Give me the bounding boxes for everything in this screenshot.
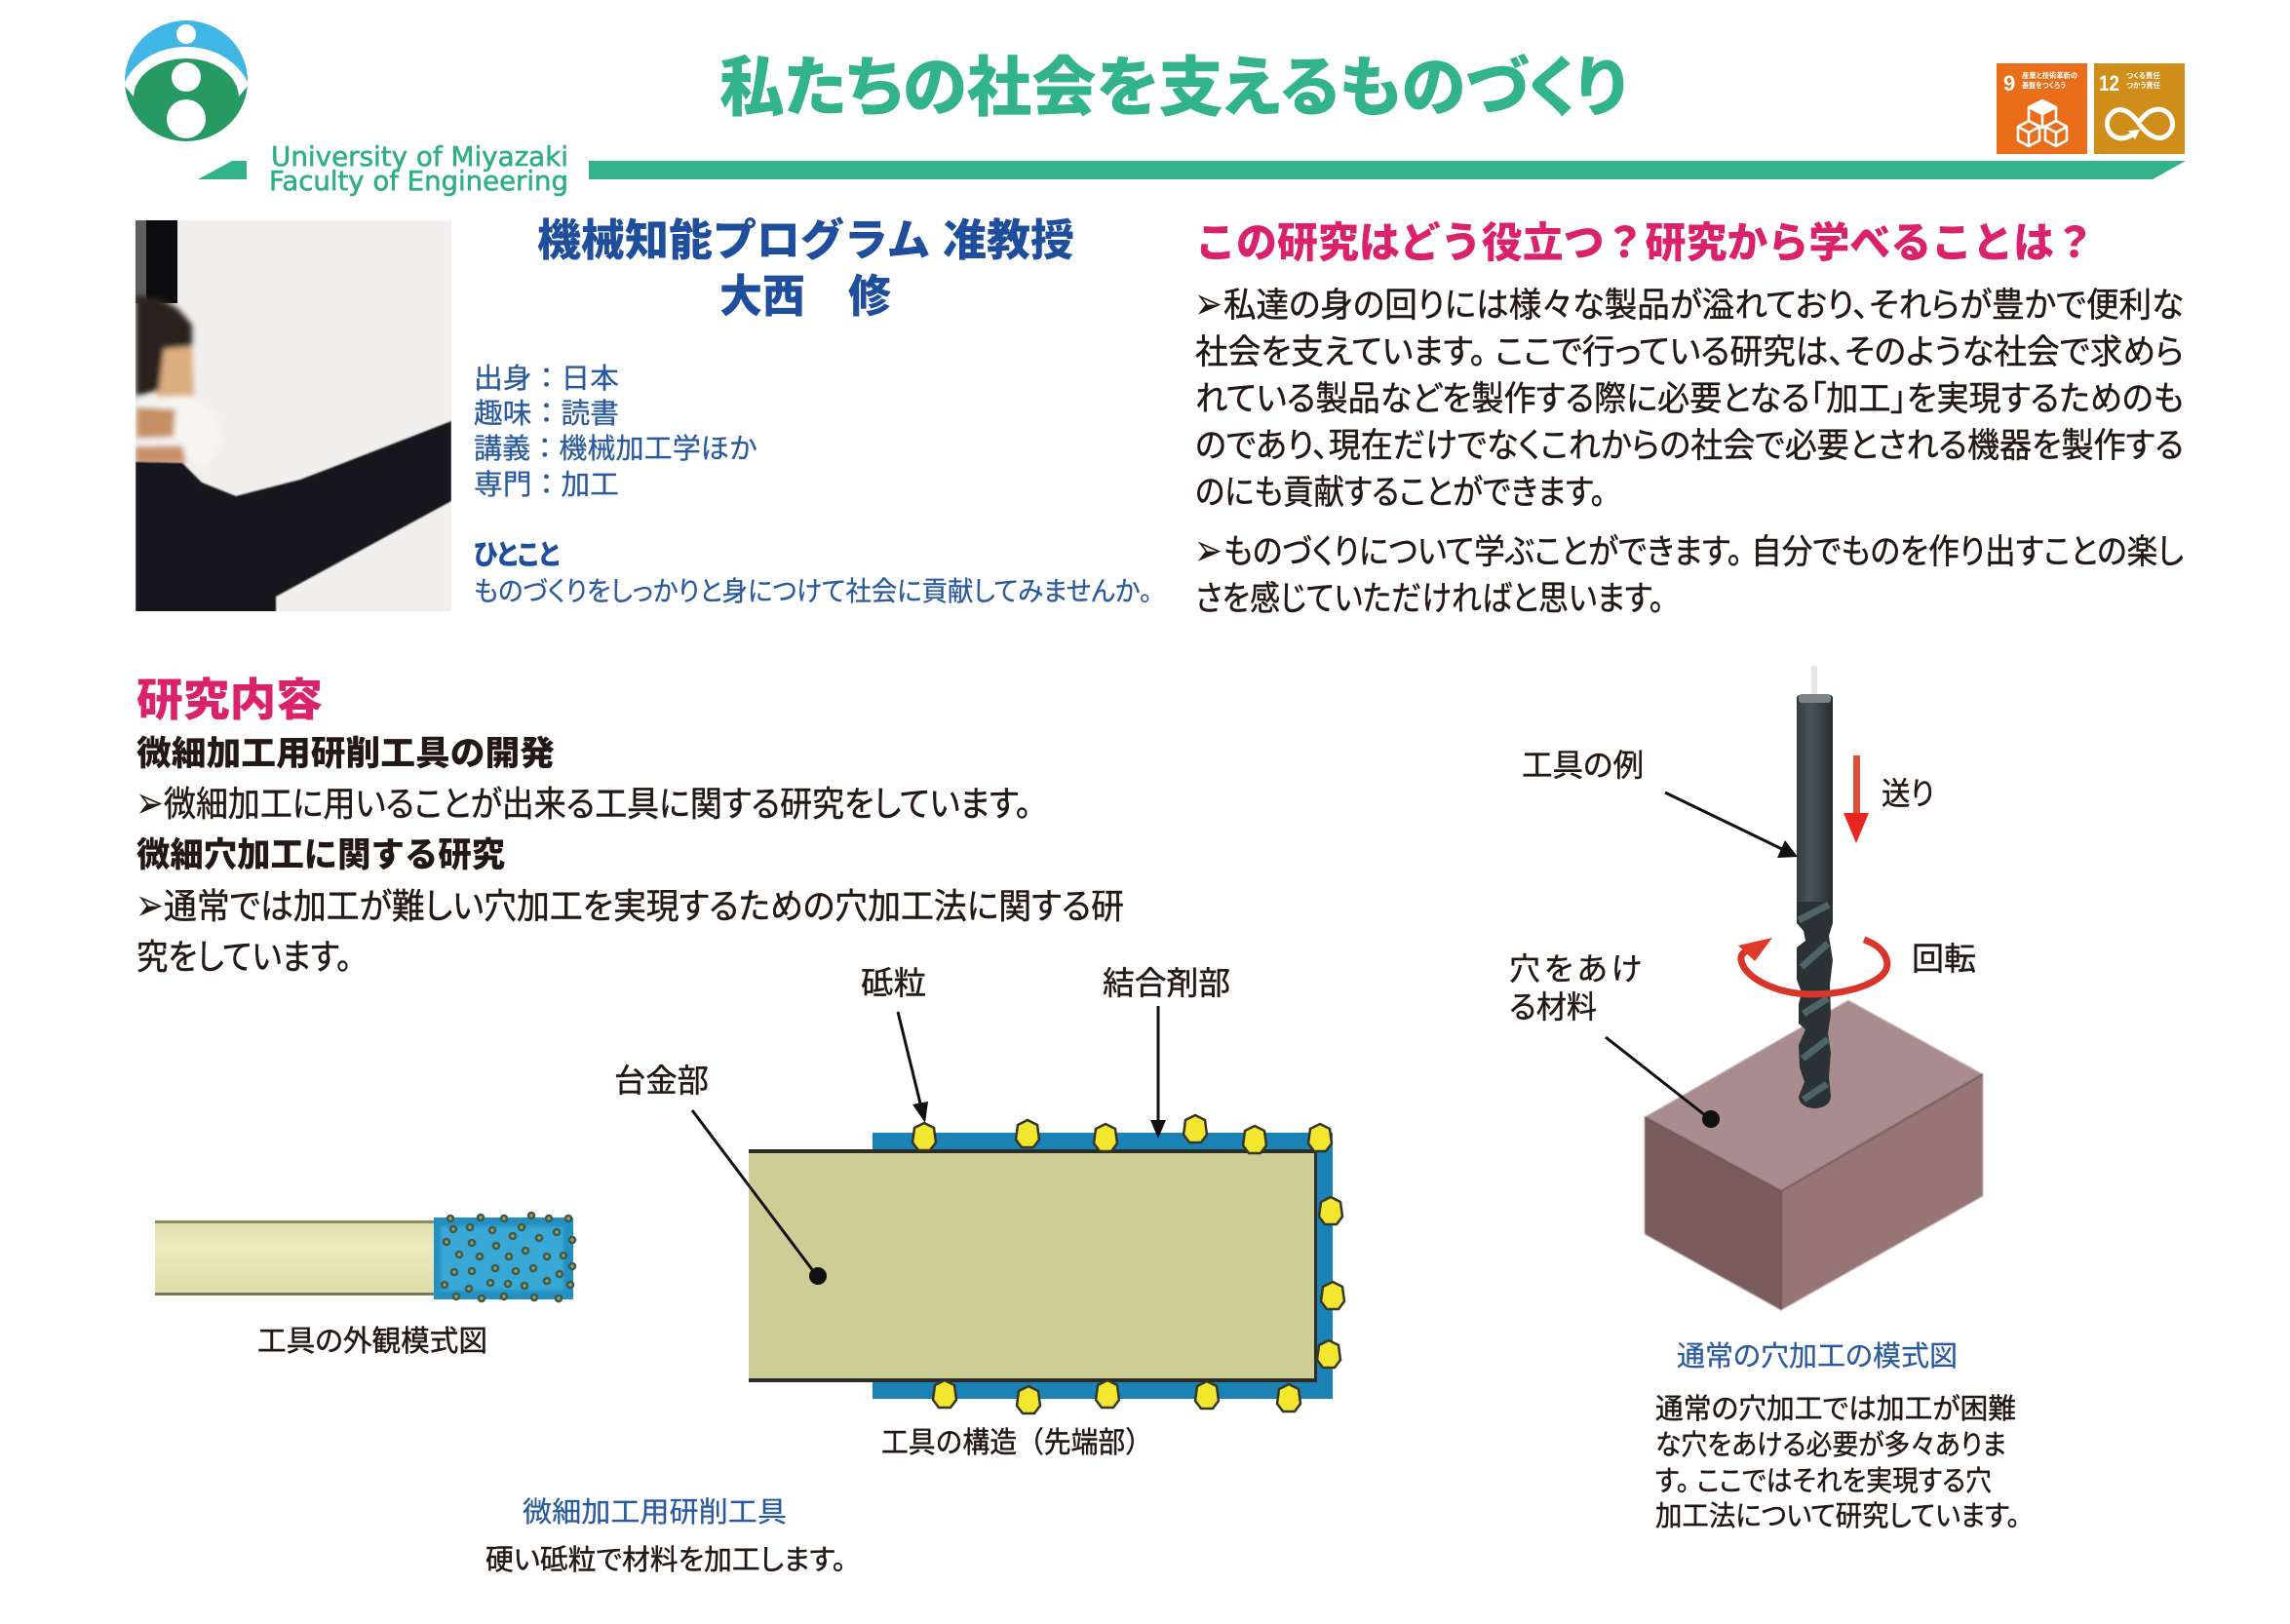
text block: drilling explanation: 通常の穴加工では加工が困難 xyxy=(1655,1393,2016,1425)
text block: usefulness of research: さを感じていただければと思います。 xyxy=(1195,580,1664,618)
bond layer xyxy=(873,1133,1333,1399)
icon: SDG goal 12: 12 xyxy=(2099,71,2119,96)
label: material to drill xyxy=(1509,951,1642,1025)
icon: SDG goal 9: 産業と技術革新の xyxy=(2022,70,2077,80)
icon: SDG goal 12 xyxy=(2094,63,2185,154)
header bar xyxy=(198,161,2186,179)
profile details: 出身：日本 xyxy=(474,363,619,395)
title: 私たちの社会を支えるものづくり xyxy=(719,52,1627,125)
text block: usefulness of research: ➢ xyxy=(1194,277,1223,329)
icon: SDG goal 9 xyxy=(1997,63,2087,154)
caption: drilling schematic: 通常の穴加工の模式図 xyxy=(1677,1340,1958,1373)
icon: SDG goal 9: 基盤をつくろう xyxy=(2022,80,2066,90)
text block: research content xyxy=(136,735,1124,977)
university wordmark: University of Miyazaki xyxy=(271,140,568,173)
researcher name and position: 機械知能プログラム 准教授 xyxy=(537,215,1074,265)
label and arrow: bond xyxy=(1103,965,1230,1139)
heading: usefulness of research: この研究はどう役立つ？研究から学べることは？ xyxy=(1195,220,2095,267)
message from researcher xyxy=(474,540,1152,606)
label and leader: base metal: 台金部 xyxy=(614,1063,709,1099)
text block: research content: ➢ xyxy=(136,776,164,829)
face xyxy=(136,292,197,466)
label: example tool: 工具の例 xyxy=(1522,748,1644,783)
caption: tool appearance: 工具の外観模式図 xyxy=(257,1326,487,1358)
message from researcher: ものづくりをしっかりと身につけて社会に貢献してみませんか。 xyxy=(474,576,1152,606)
label and arrow: abrasive grain xyxy=(861,965,928,1123)
caption text: micro grinding tool: 硬い砥粒で材料を加工します。 xyxy=(485,1544,846,1576)
leader: workpiece xyxy=(1606,1037,1720,1128)
label: rotation: 回転 xyxy=(1912,941,1976,977)
text block: drilling explanation xyxy=(1655,1393,2020,1532)
text block: research content: 微細加工に用いることが出来る工具に関する研究をしています。 xyxy=(164,784,1031,824)
label: material to drill: る材料 xyxy=(1509,989,1597,1025)
base metal xyxy=(749,1150,1316,1381)
text block: usefulness of research: れている製品などを製作する際に必要となる「加工」を実現するためのも xyxy=(1195,380,2184,418)
text block: usefulness of research xyxy=(1194,277,2184,618)
SDG icons xyxy=(1997,63,2185,154)
profile details: 趣味：読書 xyxy=(474,398,619,430)
icon: SDG goal 9: 9 xyxy=(2003,71,2015,96)
researcher name and position xyxy=(537,215,1074,322)
icon: SDG goal 12: つかう責任 xyxy=(2126,80,2160,90)
caption: micro grinding tool: 微細加工用研削工具 xyxy=(523,1496,787,1528)
workpiece block xyxy=(1645,1000,1983,1310)
icon: SDG goal 12: つくる責任 xyxy=(2126,70,2160,80)
caption: tool structure: 工具の構造（先端部） xyxy=(881,1427,1152,1459)
text block: usefulness of research: のにも貢献することができます。 xyxy=(1195,474,1606,512)
arm and body xyxy=(136,421,451,616)
figure: tool structure cross-section xyxy=(749,1115,1344,1413)
leader arrow: tool xyxy=(1665,793,1798,858)
profile details: 講義：機械加工学ほか xyxy=(474,433,757,465)
researcher name and position: 大西 修 xyxy=(719,271,891,322)
university wordmark: Faculty of Engineering xyxy=(269,165,568,197)
logo: University of Miyazaki emblem xyxy=(125,20,248,141)
label and leader: base metal xyxy=(614,1063,827,1285)
text block: drilling explanation: な穴をあける必要が多々ありま xyxy=(1655,1429,2006,1461)
text block: research content: 通常では加工が難しい穴加工を実現するための穴加工法に関する研 xyxy=(164,886,1124,926)
text block: drilling explanation: 加工法について研究しています。 xyxy=(1655,1500,2020,1532)
drill bit xyxy=(1797,666,1833,1108)
university wordmark xyxy=(269,140,568,197)
rotation arrow xyxy=(1738,938,1887,994)
label and arrow: bond: 結合剤部 xyxy=(1103,965,1230,1001)
text block: usefulness of research: のであり、現在だけでなくこれからの社会で必要とされる機器を製作する xyxy=(1195,427,2184,465)
figure: tool appearance schematic xyxy=(155,1213,575,1301)
text block: usefulness of research: 社会を支えています。 ここで行っている研究は、そのような社会で求めら xyxy=(1195,333,2184,371)
text block: drilling explanation: す。 ここではそれを実現する穴 xyxy=(1655,1465,1992,1497)
text block: research content: ➢ xyxy=(136,878,164,931)
label: material to drill: 穴をあけ xyxy=(1509,951,1642,986)
text block: usefulness of research: ➢ xyxy=(1194,523,1223,576)
profile details xyxy=(474,363,757,501)
label: feed: 送り xyxy=(1882,776,1934,811)
message from researcher: ひとこと xyxy=(474,540,560,571)
text block: usefulness of research: 私達の身の回りには様々な製品が溢れており、それらが豊かで便利な xyxy=(1223,287,2184,325)
text block: research content: 微細穴加工に関する研究 xyxy=(136,836,505,874)
feed arrow xyxy=(1844,755,1869,843)
heading: research content: 研究内容 xyxy=(136,675,323,725)
text block: research content: 微細加工用研削工具の開発 xyxy=(136,735,555,773)
photo: researcher wearing mask, pointing xyxy=(136,220,451,616)
abrasive grains xyxy=(912,1115,1344,1413)
figure: normal drilling schematic xyxy=(1606,666,1983,1310)
label and arrow: abrasive grain: 砥粒 xyxy=(861,965,926,1001)
text block: research content: 究をしています。 xyxy=(136,937,352,977)
profile details: 専門：加工 xyxy=(474,469,619,501)
text block: usefulness of research: ものづくりについて学ぶことができます。 自分でものを作り出すことの楽し xyxy=(1223,533,2184,571)
